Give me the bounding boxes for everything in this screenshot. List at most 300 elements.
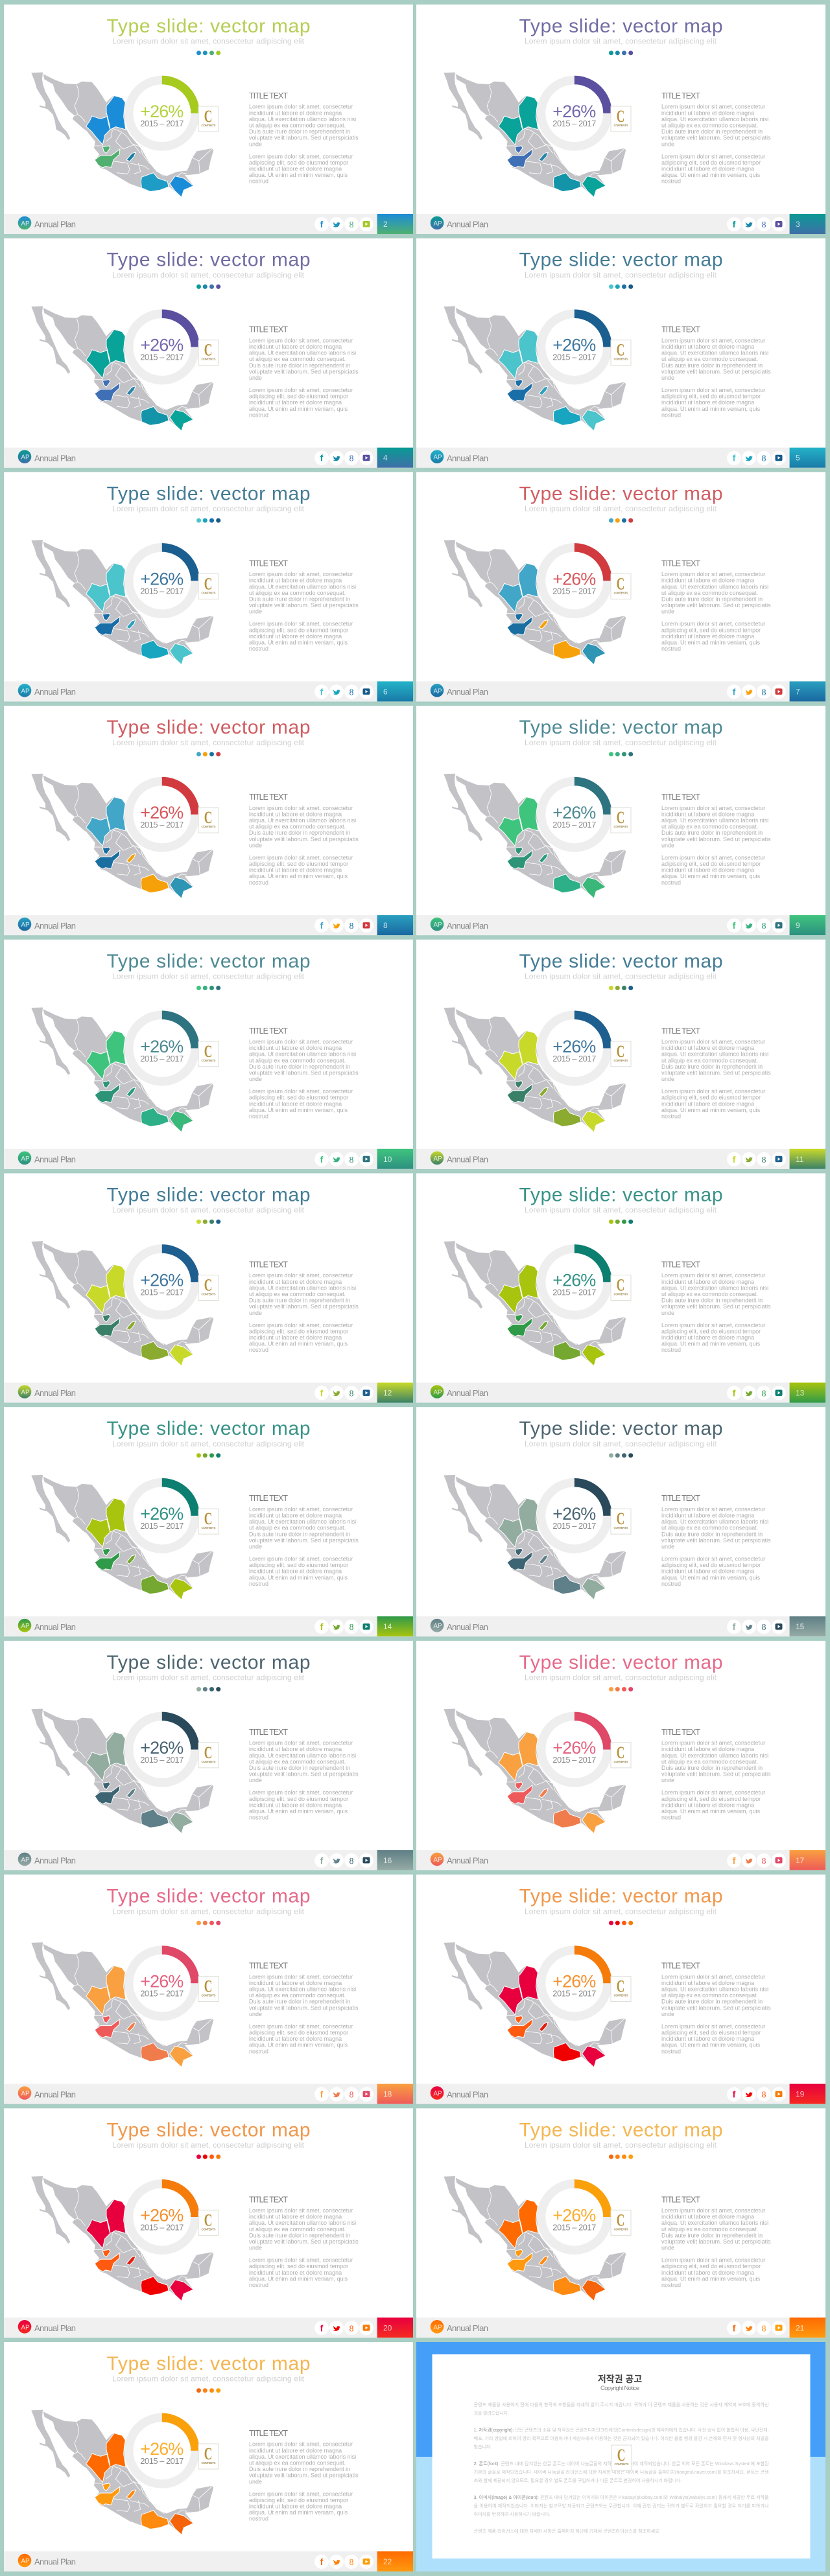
paragraph 2: adipiscing elit, sed do eiusmod tempor	[249, 1796, 348, 1802]
percentage: +26%	[552, 1738, 596, 1758]
paragraph 1: ut aliquip ex ea commodo consequat.	[661, 1291, 758, 1297]
footer bar: AP	[21, 688, 30, 695]
notice section 2: 츠와 함께 제공되지 않으므로, 필요할 경우 별도 폰트를 구입하거나 다른 폰트로 변경하여 사용하시기 바랍니다.	[474, 2477, 682, 2483]
footer bar	[416, 1149, 825, 1169]
logo	[611, 807, 631, 833]
footer bar	[4, 681, 413, 701]
logo	[198, 2210, 219, 2235]
paragraph 1: unde	[249, 1543, 262, 1549]
title: Type slide: vector map	[106, 717, 310, 738]
subtitle: Lorem ipsum dolor sit amet, consectetur adipiscing elit	[112, 1205, 305, 1214]
paragraph 2: Lorem ipsum dolor sit amet, consectetur	[249, 1789, 353, 1796]
panel: slide 5	[416, 238, 825, 468]
paragraph 2: adipiscing elit, sed do eiusmod tempor	[661, 393, 761, 400]
paragraph 1: Duis aute irure dolor in reprehenderit in	[661, 1999, 763, 2005]
subtitle: Lorem ipsum dolor sit amet, consectetur adipiscing elit	[525, 270, 717, 279]
notice section 3: 을 이용하여 제작되었습니다. 이미지는 참고모양 제공되고 콘텐츠와는 무관합니다. 이에 관한 권리는 귀하가 별도로 확인하고 필요할 경우 처리를 피하거나	[474, 2503, 769, 2509]
footer bar: 11	[796, 1155, 804, 1164]
paragraph 1: Duis aute irure dolor in reprehenderit in	[249, 2232, 350, 2238]
paragraph 1: ut aliquip ex ea commodo consequat.	[661, 1525, 758, 1531]
paragraph 2: incididunt ut labore et dolore magna	[249, 2036, 342, 2042]
paragraph 1: ut aliquip ex ea commodo consequat.	[249, 1291, 346, 1297]
paragraph 1: voluptate velit laborum. Sed ut perspiciatis	[661, 602, 771, 609]
paragraph 1: unde	[249, 1310, 262, 1316]
paragraph 1: Lorem ipsum dolor sit amet, consectetur	[249, 805, 353, 811]
years: 2015 – 2017	[140, 1054, 184, 1063]
paragraph 1: voluptate velit laborum. Sed ut perspiciatis	[249, 1303, 359, 1310]
paragraph 2: adipiscing elit, sed do eiusmod tempor	[249, 627, 348, 633]
paragraph 1: voluptate velit laborum. Sed ut perspiciatis	[249, 2238, 359, 2245]
paragraph 2: nostrud	[661, 2048, 681, 2054]
paragraph 2: nostrud	[661, 1581, 681, 1587]
subtitle: Lorem ipsum dolor sit amet, consectetur adipiscing elit	[525, 1907, 717, 1916]
paragraph 2: aliqua. Ut enim ad minim veniam, quis	[661, 406, 761, 412]
title: Type slide: vector map	[106, 1185, 310, 1205]
title: Type slide: vector map	[106, 2119, 310, 2141]
paragraph 2: incididunt ut labore et dolore magna	[249, 1334, 342, 1341]
years: 2015 – 2017	[140, 586, 184, 596]
paragraph 1: Duis aute irure dolor in reprehenderit in	[661, 1297, 763, 1304]
title: Type slide: vector map	[106, 1886, 310, 1907]
subtitle: Lorem ipsum dolor sit amet, consectetur adipiscing elit	[525, 1205, 717, 1214]
subtitle: Lorem ipsum dolor sit amet, consectetur adipiscing elit	[112, 1439, 305, 1448]
paragraph 1: incididunt ut labore et dolore magna	[661, 577, 754, 584]
title: Type slide: vector map	[106, 16, 310, 37]
logo	[611, 1509, 631, 1534]
paragraph 2: aliqua. Ut enim ad minim veniam, quis	[661, 640, 761, 646]
paragraph 1: ut aliquip ex ea commodo consequat.	[249, 356, 346, 362]
decorative dots	[609, 986, 633, 990]
years: 2015 – 2017	[552, 1989, 596, 1999]
paragraph 1: aliqua. Ut exercitation ullamco laboris nisi	[249, 2454, 356, 2460]
notice subheading: Copyright Notice	[600, 2385, 639, 2392]
paragraph 1: unde	[661, 1777, 674, 1783]
paragraph 1: Duis aute irure dolor in reprehenderit in	[249, 1297, 350, 1304]
footer bar	[4, 1149, 413, 1169]
paragraph 1: unde	[249, 2245, 262, 2251]
paragraph 2: adipiscing elit, sed do eiusmod tempor	[249, 1328, 348, 1334]
text heading: TITLE TEXT	[249, 1260, 288, 1269]
years: 2015 – 2017	[552, 1755, 596, 1765]
footer bar	[416, 2317, 825, 2338]
footer bar: AP	[21, 1623, 30, 1630]
paragraph 1: ut aliquip ex ea commodo consequat.	[661, 2226, 758, 2233]
title: Type slide: vector map	[106, 951, 310, 972]
footer bar: 6	[383, 687, 388, 696]
footer bar: 7	[796, 687, 800, 696]
map of Mexico	[444, 1475, 626, 1600]
percentage: +26%	[552, 569, 596, 588]
logo	[611, 2210, 631, 2235]
years: 2015 – 2017	[140, 820, 184, 830]
footer bar: AP	[433, 922, 442, 929]
subtitle: Lorem ipsum dolor sit amet, consectetur adipiscing elit	[112, 1673, 305, 1682]
percentage: +26%	[552, 336, 596, 355]
paragraph 2: Lorem ipsum dolor sit amet, consectetur	[249, 1555, 353, 1562]
paragraph 1: Lorem ipsum dolor sit amet, consectetur	[661, 1740, 765, 1746]
paragraph 1: Lorem ipsum dolor sit amet, consectetur	[661, 1039, 765, 1045]
donut chart	[129, 1015, 195, 1082]
title: Type slide: vector map	[519, 1185, 722, 1205]
footer bar: 3	[796, 220, 800, 229]
paragraph 1: aliqua. Ut exercitation ullamco laboris nisi	[661, 350, 768, 356]
footer bar: Annual Plan	[34, 1856, 76, 1866]
notice section 2: 2. 폰트(font): 콘텐츠 내에 담겨있는 한글 폰트는 네이버 나눔글꼴의 저작권을 기준하여 제작되었습니다. 한글 외의 모든 폰트는 Windows System에 포함된	[474, 2462, 769, 2466]
logo	[198, 574, 219, 599]
paragraph 1: Lorem ipsum dolor sit amet, consectetur	[661, 337, 765, 343]
percentage: +26%	[552, 1504, 596, 1524]
map of Mexico	[31, 73, 213, 197]
footer bar: AP	[433, 688, 442, 695]
decorative dots	[196, 986, 220, 990]
percentage: +26%	[140, 1504, 184, 1524]
decorative dots	[609, 752, 633, 756]
donut chart	[541, 1483, 608, 1549]
paragraph 1: unde	[249, 1777, 262, 1783]
years: 2015 – 2017	[552, 1521, 596, 1531]
map of Mexico	[31, 1007, 213, 1132]
paragraph 1: Lorem ipsum dolor sit amet, consectetur	[249, 571, 353, 577]
paragraph 2: Lorem ipsum dolor sit amet, consectetur	[661, 2257, 765, 2264]
paragraph 2: Lorem ipsum dolor sit amet, consectetur	[249, 854, 353, 861]
paragraph 2: nostrud	[249, 1815, 268, 1821]
footer bar: Annual Plan	[447, 1155, 488, 1165]
paragraph 1: aliqua. Ut exercitation ullamco laboris nisi	[661, 1986, 768, 1993]
paragraph 2: incididunt ut labore et dolore magna	[661, 1568, 754, 1575]
paragraph 2: nostrud	[249, 2516, 268, 2522]
donut chart	[541, 1015, 608, 1082]
paragraph 2: Lorem ipsum dolor sit amet, consectetur	[249, 153, 353, 159]
years: 2015 – 2017	[552, 1287, 596, 1297]
paragraph 1: aliqua. Ut exercitation ullamco laboris nisi	[661, 116, 768, 122]
paragraph 1: incididunt ut labore et dolore magna	[249, 1512, 342, 1518]
percentage: +26%	[552, 102, 596, 121]
paragraph 1: incididunt ut labore et dolore magna	[249, 343, 342, 350]
footer bar: 18	[383, 2090, 392, 2099]
paragraph 1: aliqua. Ut exercitation ullamco laboris nisi	[249, 1518, 356, 1525]
paragraph 1: unde	[249, 842, 262, 848]
subtitle: Lorem ipsum dolor sit amet, consectetur adipiscing elit	[112, 2374, 305, 2384]
years: 2015 – 2017	[552, 2222, 596, 2232]
paragraph 2: nostrud	[249, 178, 268, 185]
footer bar	[416, 1850, 825, 1870]
paragraph 1: incididunt ut labore et dolore magna	[249, 1980, 342, 1986]
decorative dots	[196, 1921, 220, 1925]
footer bar: AP	[21, 2091, 30, 2098]
years: 2015 – 2017	[140, 2456, 184, 2466]
paragraph 2: nostrud	[249, 645, 268, 652]
paragraph 1: voluptate velit laborum. Sed ut perspiciatis	[661, 1070, 771, 1076]
percentage: +26%	[140, 1738, 184, 1758]
footer bar: Annual Plan	[447, 2323, 488, 2333]
footer bar	[4, 1850, 413, 1870]
paragraph 1: ut aliquip ex ea commodo consequat.	[249, 1057, 346, 1063]
decorative dots	[196, 2154, 220, 2159]
paragraph 1: voluptate velit laborum. Sed ut perspiciatis	[249, 2004, 359, 2011]
paragraph 2: incididunt ut labore et dolore magna	[661, 633, 754, 640]
map of Mexico	[31, 2176, 213, 2301]
paragraph 1: ut aliquip ex ea commodo consequat.	[661, 824, 758, 830]
logo	[198, 1275, 219, 1300]
subtitle: Lorem ipsum dolor sit amet, consectetur adipiscing elit	[112, 1907, 305, 1916]
logo	[611, 1743, 631, 1768]
percentage: +26%	[140, 2205, 184, 2225]
footer bar	[416, 214, 825, 234]
footer bar: 2	[383, 220, 388, 229]
paragraph 2: adipiscing elit, sed do eiusmod tempor	[661, 1328, 761, 1334]
subtitle: Lorem ipsum dolor sit amet, consectetur adipiscing elit	[525, 37, 717, 46]
notice intro: 것을 알려드립니다.	[474, 2410, 509, 2416]
paragraph 1: Duis aute irure dolor in reprehenderit in	[249, 128, 350, 135]
text heading: TITLE TEXT	[249, 1962, 288, 1971]
title: Type slide: vector map	[519, 1652, 722, 1673]
paragraph 1: incididunt ut labore et dolore magna	[661, 1045, 754, 1051]
paragraph 1: incididunt ut labore et dolore magna	[249, 110, 342, 116]
paragraph 2: aliqua. Ut enim ad minim veniam, quis	[249, 1808, 348, 1815]
logo	[611, 2445, 632, 2470]
text heading: TITLE TEXT	[661, 559, 700, 568]
donut chart	[541, 314, 608, 380]
paragraph 2: Lorem ipsum dolor sit amet, consectetur	[661, 2023, 765, 2030]
subtitle: Lorem ipsum dolor sit amet, consectetur adipiscing elit	[525, 504, 717, 513]
paragraph 2: nostrud	[661, 1113, 681, 1120]
footer bar: 19	[796, 2090, 805, 2099]
paragraph 2: incididunt ut labore et dolore magna	[661, 1334, 754, 1341]
footer bar: 13	[796, 1388, 805, 1397]
decorative dots	[196, 284, 220, 289]
paragraph 1: unde	[661, 609, 674, 615]
paragraph 2: aliqua. Ut enim ad minim veniam, quis	[661, 1341, 761, 1347]
decorative dots	[196, 51, 220, 55]
paragraph 2: incididunt ut labore et dolore magna	[661, 2269, 754, 2276]
paragraph 1: Lorem ipsum dolor sit amet, consectetur	[661, 805, 765, 811]
title: Type slide: vector map	[519, 717, 722, 738]
paragraph 1: ut aliquip ex ea commodo consequat.	[249, 2460, 346, 2466]
paragraph 2: aliqua. Ut enim ad minim veniam, quis	[249, 1574, 348, 1581]
title: Type slide: vector map	[106, 483, 310, 504]
map of Mexico	[31, 1241, 213, 1366]
paragraph 1: aliqua. Ut exercitation ullamco laboris nisi	[249, 817, 356, 824]
paragraph 2: nostrud	[661, 1347, 681, 1353]
paragraph 2: adipiscing elit, sed do eiusmod tempor	[661, 1562, 761, 1568]
paragraph 2: Lorem ipsum dolor sit amet, consectetur	[249, 2023, 353, 2030]
notice section 1: 배포, 기타 방법에 의하여 영리 목적으로 이용하거나 제삼자에게 이용하는 것은 금지되어 있습니다. 이러한 불법 행위 발견 시 손해와 민사 및 형사상의 처벌을	[474, 2435, 769, 2441]
paragraph 2: adipiscing elit, sed do eiusmod tempor	[249, 2497, 348, 2503]
footer bar: 17	[796, 1856, 805, 1865]
map of Mexico	[444, 540, 626, 665]
paragraph 2: nostrud	[661, 645, 681, 652]
donut chart	[129, 80, 195, 146]
paragraph 2: aliqua. Ut enim ad minim veniam, quis	[661, 1107, 761, 1113]
paragraph 2: aliqua. Ut enim ad minim veniam, quis	[249, 1107, 348, 1113]
paragraph 1: incididunt ut labore et dolore magna	[249, 2214, 342, 2220]
paragraph 1: Lorem ipsum dolor sit amet, consectetur	[249, 1973, 353, 1980]
logo	[611, 340, 631, 366]
paragraph 2: incididunt ut labore et dolore magna	[249, 633, 342, 640]
paragraph 1: incididunt ut labore et dolore magna	[249, 1279, 342, 1285]
panel: slide 21	[416, 2108, 825, 2338]
paragraph 1: unde	[249, 1076, 262, 1082]
years: 2015 – 2017	[140, 119, 184, 128]
paragraph 2: incididunt ut labore et dolore magna	[661, 166, 754, 172]
footer bar	[4, 1383, 413, 1402]
paragraph 1: unde	[661, 375, 674, 381]
text heading: TITLE TEXT	[249, 1728, 288, 1737]
footer bar: AP	[21, 922, 30, 929]
years: 2015 – 2017	[140, 1521, 184, 1531]
map of Mexico	[31, 1709, 213, 1833]
footer bar: Annual Plan	[34, 2557, 76, 2567]
title: Type slide: vector map	[106, 2353, 310, 2374]
paragraph 1: incididunt ut labore et dolore magna	[661, 110, 754, 116]
paragraph 2: adipiscing elit, sed do eiusmod tempor	[661, 1095, 761, 1101]
paragraph 2: Lorem ipsum dolor sit amet, consectetur	[249, 1088, 353, 1095]
decorative dots	[609, 284, 633, 289]
paragraph 2: aliqua. Ut enim ad minim veniam, quis	[249, 1341, 348, 1347]
paragraph 2: incididunt ut labore et dolore magna	[249, 867, 342, 874]
paragraph 1: aliqua. Ut exercitation ullamco laboris nisi	[249, 1284, 356, 1291]
paragraph 1: incididunt ut labore et dolore magna	[661, 1746, 754, 1752]
paragraph 2: nostrud	[249, 2282, 268, 2288]
paragraph 2: adipiscing elit, sed do eiusmod tempor	[249, 1562, 348, 1568]
subtitle: Lorem ipsum dolor sit amet, consectetur adipiscing elit	[112, 738, 305, 747]
paragraph 1: aliqua. Ut exercitation ullamco laboris nisi	[249, 1051, 356, 1058]
footer bar: AP	[21, 1389, 30, 1396]
paragraph 1: incididunt ut labore et dolore magna	[661, 343, 754, 350]
panel: slide 11	[416, 940, 825, 1169]
paragraph 1: ut aliquip ex ea commodo consequat.	[249, 590, 346, 596]
footer bar: Annual Plan	[34, 687, 76, 697]
paragraph 1: incididunt ut labore et dolore magna	[661, 2214, 754, 2220]
subtitle: Lorem ipsum dolor sit amet, consectetur adipiscing elit	[525, 1673, 717, 1682]
paragraph 1: incididunt ut labore et dolore magna	[249, 577, 342, 584]
paragraph 1: aliqua. Ut exercitation ullamco laboris nisi	[661, 1518, 768, 1525]
notice section 3: 3. 이미지(image) & 아이콘(icon): 콘텐츠 내에 담겨있는 이미지와 아이콘은 Pixabay(pixabay.com)와 Webalys(webalys.com) 등에서 제공한 무료 저작물	[474, 2496, 769, 2500]
footer bar	[4, 915, 413, 935]
footer bar: AP	[433, 1155, 442, 1163]
title: Type slide: vector map	[106, 1418, 310, 1439]
percentage: +26%	[140, 803, 184, 822]
paragraph 2: adipiscing elit, sed do eiusmod tempor	[249, 393, 348, 400]
paragraph 2: aliqua. Ut enim ad minim veniam, quis	[661, 1574, 761, 1581]
paragraph 1: ut aliquip ex ea commodo consequat.	[661, 1758, 758, 1765]
footer bar: 5	[796, 454, 800, 463]
paragraph 1: unde	[661, 842, 674, 848]
footer bar: AP	[21, 1155, 30, 1163]
footer bar: AP	[21, 454, 30, 461]
text heading: TITLE TEXT	[249, 325, 288, 334]
map of Mexico	[31, 540, 213, 665]
title: Type slide: vector map	[519, 483, 722, 504]
years: 2015 – 2017	[140, 2222, 184, 2232]
paragraph 1: Lorem ipsum dolor sit amet, consectetur	[249, 1039, 353, 1045]
text heading: TITLE TEXT	[249, 2195, 288, 2204]
paragraph 1: aliqua. Ut exercitation ullamco laboris nisi	[249, 1986, 356, 1993]
subtitle: Lorem ipsum dolor sit amet, consectetur adipiscing elit	[112, 972, 305, 981]
notice section 1: 받습니다.	[474, 2444, 492, 2450]
title: Type slide: vector map	[519, 2119, 722, 2141]
map of Mexico	[31, 774, 213, 898]
years: 2015 – 2017	[140, 1989, 184, 1999]
panel: slide 2	[4, 5, 413, 234]
footer bar	[4, 2317, 413, 2338]
donut chart	[129, 1950, 195, 2017]
percentage: +26%	[140, 569, 184, 588]
paragraph 1: unde	[661, 1543, 674, 1549]
donut chart	[129, 314, 195, 380]
paragraph 2: incididunt ut labore et dolore magna	[661, 1802, 754, 1808]
paragraph 2: nostrud	[661, 879, 681, 886]
paragraph 2: incididunt ut labore et dolore magna	[249, 2269, 342, 2276]
paragraph 2: nostrud	[249, 879, 268, 886]
paragraph 1: voluptate velit laborum. Sed ut perspiciatis	[661, 1537, 771, 1544]
paragraph 2: Lorem ipsum dolor sit amet, consectetur	[661, 1322, 765, 1329]
footer bar: AP	[433, 1623, 442, 1630]
paragraph 1: incididunt ut labore et dolore magna	[249, 1045, 342, 1051]
panel: slide 18	[4, 1875, 413, 2104]
title: Type slide: vector map	[519, 249, 722, 271]
logo	[198, 1743, 219, 1768]
paragraph 1: voluptate velit laborum. Sed ut perspiciatis	[249, 1070, 359, 1076]
paragraph 2: nostrud	[249, 1347, 268, 1353]
panel: slide 19	[416, 1875, 825, 2104]
subtitle: Lorem ipsum dolor sit amet, consectetur adipiscing elit	[112, 37, 305, 46]
paragraph 1: aliqua. Ut exercitation ullamco laboris nisi	[249, 583, 356, 590]
paragraph 1: voluptate velit laborum. Sed ut perspiciatis	[661, 1771, 771, 1778]
years: 2015 – 2017	[552, 353, 596, 362]
decorative dots	[196, 518, 220, 523]
paragraph 2: adipiscing elit, sed do eiusmod tempor	[661, 627, 761, 633]
donut chart	[541, 1716, 608, 1783]
footer bar: 9	[796, 921, 800, 930]
footer bar	[4, 1616, 413, 1636]
footer bar: AP	[21, 2558, 30, 2565]
paragraph 1: Lorem ipsum dolor sit amet, consectetur	[249, 104, 353, 110]
paragraph 1: unde	[661, 1076, 674, 1082]
notice heading: 저작권 공고	[598, 2374, 642, 2384]
footer bar: Annual Plan	[34, 921, 76, 931]
paragraph 1: Duis aute irure dolor in reprehenderit in	[249, 1765, 350, 1771]
paragraph 2: aliqua. Ut enim ad minim veniam, quis	[249, 2042, 348, 2048]
panel: slide 22	[4, 2342, 413, 2571]
paragraph 2: Lorem ipsum dolor sit amet, consectetur	[661, 621, 765, 627]
decorative dots	[609, 2154, 633, 2159]
donut chart	[541, 1950, 608, 2017]
paragraph 2: Lorem ipsum dolor sit amet, consectetur	[661, 153, 765, 159]
paragraph 1: Duis aute irure dolor in reprehenderit in	[249, 830, 350, 836]
percentage: +26%	[140, 1037, 184, 1056]
paragraph 2: nostrud	[249, 1113, 268, 1120]
paragraph 1: voluptate velit laborum. Sed ut perspiciatis	[249, 135, 359, 141]
paragraph 1: Duis aute irure dolor in reprehenderit in	[661, 2232, 763, 2238]
paragraph 2: Lorem ipsum dolor sit amet, consectetur	[661, 1555, 765, 1562]
text heading: TITLE TEXT	[249, 559, 288, 568]
paragraph 1: aliqua. Ut exercitation ullamco laboris nisi	[661, 817, 768, 824]
panel: slide 3	[416, 5, 825, 234]
paragraph 1: aliqua. Ut exercitation ullamco laboris nisi	[661, 1284, 768, 1291]
footer bar: Annual Plan	[34, 220, 76, 229]
donut chart	[541, 2184, 608, 2250]
map of Mexico	[444, 1007, 626, 1132]
paragraph 1: voluptate velit laborum. Sed ut perspiciatis	[661, 368, 771, 375]
paragraph 2: incididunt ut labore et dolore magna	[661, 2036, 754, 2042]
paragraph 1: Duis aute irure dolor in reprehenderit in	[249, 362, 350, 369]
paragraph 2: incididunt ut labore et dolore magna	[249, 1568, 342, 1575]
paragraph 1: Lorem ipsum dolor sit amet, consectetur	[249, 337, 353, 343]
paragraph 1: Lorem ipsum dolor sit amet, consectetur	[661, 1272, 765, 1279]
paragraph 2: nostrud	[661, 412, 681, 418]
footer bar	[416, 1616, 825, 1636]
